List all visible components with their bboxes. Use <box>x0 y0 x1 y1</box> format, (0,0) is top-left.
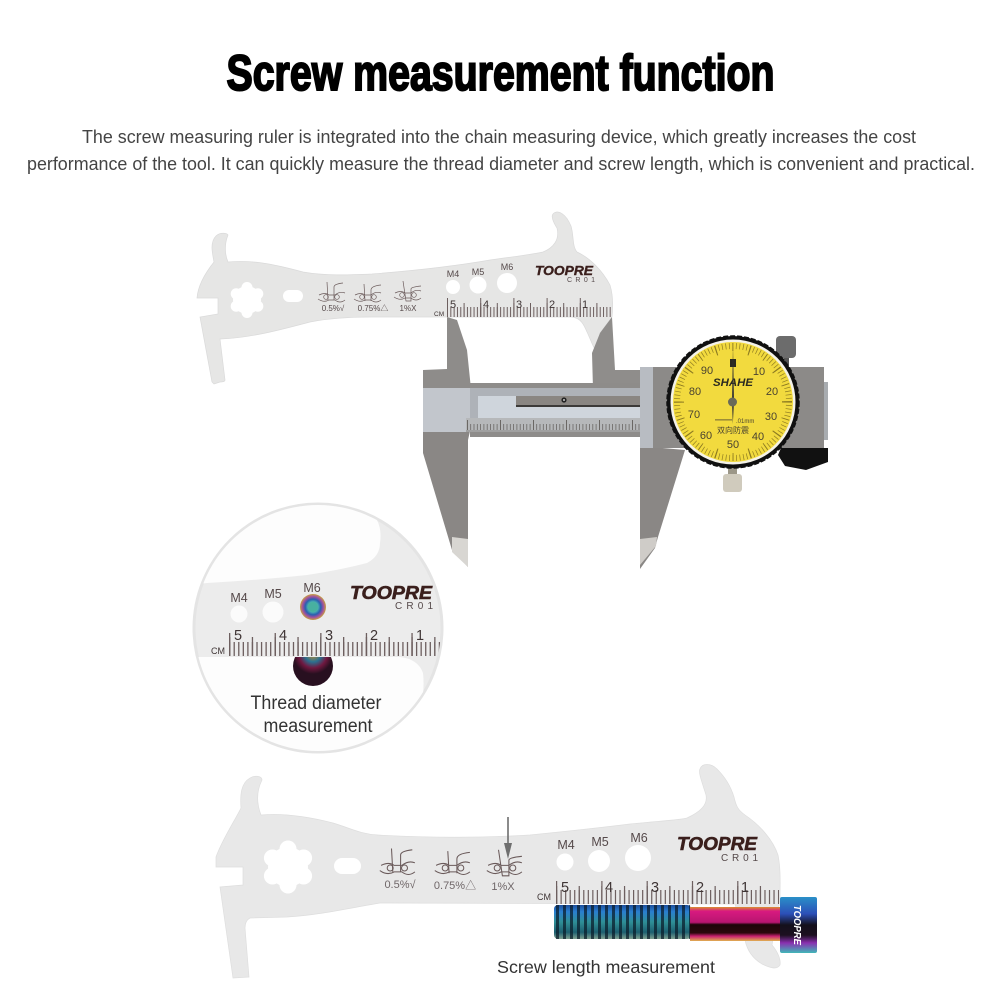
ruler numbers: CM <box>211 646 225 656</box>
thread <box>554 905 691 939</box>
ruler numbers: 5 <box>561 880 569 896</box>
dial numbers: 90 <box>701 365 713 377</box>
wear labels: 1%X <box>491 881 515 893</box>
intro text <box>27 127 975 174</box>
icon: chain wear 1% <box>394 281 421 301</box>
brand: TOOPRE <box>535 263 593 278</box>
intro text: performance of the tool. It can quickly measure the thread diameter and screw length, which is convenient and practical. <box>27 154 975 174</box>
dial numbers: 30 <box>765 411 777 423</box>
top chain measuring tool <box>197 212 613 384</box>
M labels: M4 <box>557 838 575 852</box>
dial numbers: 50 <box>727 439 739 451</box>
oval slot <box>334 858 361 874</box>
M labels: M5 <box>472 267 484 277</box>
M holes <box>446 273 517 294</box>
head: TOOPRE <box>791 905 803 946</box>
icon: six-lobe hole <box>231 282 263 318</box>
caption <box>250 693 382 737</box>
M labels <box>447 262 513 279</box>
model: CR01 <box>567 277 595 284</box>
ruler numbers: 1 <box>416 628 424 644</box>
ruler numbers: 4 <box>605 880 613 896</box>
screw tip below the ruler <box>293 657 333 686</box>
M labels: M6 <box>501 262 513 272</box>
hub <box>728 398 737 406</box>
ruler <box>229 644 441 649</box>
needle <box>732 346 734 424</box>
wear labels: 0.75%△ <box>358 304 388 313</box>
shank <box>690 907 780 941</box>
slider block <box>640 367 824 448</box>
caption: screw length: Screw length measurement <box>497 957 715 977</box>
lower right jaw <box>640 446 685 569</box>
dial numbers: 80 <box>689 386 701 398</box>
head <box>780 897 817 953</box>
ruler numbers <box>434 299 588 318</box>
ruler numbers <box>537 880 749 902</box>
M labels <box>557 831 648 852</box>
bottom chain measuring tool <box>216 764 817 978</box>
intro text: The screw measuring ruler is integrated into the chain measuring device, which greatly increases the cost <box>82 127 916 147</box>
wear labels: 0.75%△ <box>434 879 476 892</box>
dial scale note: .01mm <box>736 419 754 425</box>
icon: six-lobe hole <box>264 840 312 894</box>
oval slot <box>283 290 303 302</box>
arrow <box>504 817 512 859</box>
titanium screw <box>554 897 817 953</box>
ruler numbers: CM <box>537 892 551 902</box>
dial numbers: 40 <box>752 431 764 443</box>
ruler numbers: 4 <box>483 299 489 311</box>
main beam <box>423 383 645 437</box>
M labels: M4 <box>230 591 248 605</box>
thumb wheel <box>778 448 828 470</box>
ruler numbers: 2 <box>549 299 555 311</box>
icon: chain wear 0.5% <box>380 848 415 874</box>
model: CR01 <box>395 601 433 612</box>
ruler numbers: CM <box>434 311 444 318</box>
M labels <box>230 581 321 605</box>
dial gauge <box>667 336 799 468</box>
dial numbers <box>688 365 778 451</box>
ruler <box>556 892 779 897</box>
dial numbers: 10 <box>753 366 765 378</box>
top knob <box>776 336 796 370</box>
dial ticks <box>677 346 789 458</box>
ruler numbers: 3 <box>325 628 333 644</box>
ruler numbers: 2 <box>696 880 704 896</box>
icon: chain wear 0.75% <box>435 851 470 874</box>
upper right jaw <box>592 317 641 389</box>
white cutouts <box>190 500 424 760</box>
icon: chain wear 0.5% <box>318 282 345 302</box>
M holes <box>230 602 284 622</box>
screw seen through M6 <box>300 594 326 620</box>
magnifier circle: thread diameter <box>190 500 442 760</box>
M labels: M5 <box>591 835 609 849</box>
dial numbers: 60 <box>700 430 712 442</box>
upper left jaw <box>423 317 471 389</box>
ruler numbers: 2 <box>370 628 378 644</box>
icon: chain wear 0.75% <box>354 284 381 302</box>
dial zero mark <box>730 359 736 367</box>
M holes <box>556 845 651 872</box>
brand: TOOPRE <box>677 834 758 854</box>
title: Screw measurement function <box>226 45 774 101</box>
dial numbers: 70 <box>688 409 700 421</box>
ruler numbers: 5 <box>450 299 456 311</box>
dial scale note <box>715 419 754 435</box>
ruler <box>447 308 612 312</box>
wear labels: 0.5%√ <box>384 879 417 891</box>
caption: measurement <box>264 716 373 737</box>
wear labels <box>384 879 515 893</box>
model: CR01 <box>721 853 758 864</box>
ruler numbers: 3 <box>651 880 659 896</box>
ruler numbers: 5 <box>234 628 242 644</box>
bottom knob <box>723 465 742 492</box>
wear labels: 0.5%√ <box>322 304 345 313</box>
dial numbers: 20 <box>766 386 778 398</box>
M labels: M5 <box>264 587 282 601</box>
M labels: M6 <box>630 831 648 845</box>
ruler numbers: 4 <box>279 628 287 644</box>
icon: chain wear 1% <box>487 850 522 876</box>
caption: Thread diameter <box>250 693 382 714</box>
ruler numbers: 1 <box>582 299 588 311</box>
dial scale note: 双向防震 <box>717 425 749 435</box>
M labels: M6 <box>303 581 321 595</box>
ruler numbers: 1 <box>741 880 749 896</box>
wear labels: 1%X <box>400 304 417 313</box>
M labels: M4 <box>447 269 459 279</box>
wear labels <box>322 304 417 313</box>
ruler numbers <box>211 628 424 656</box>
brand: TOOPRE <box>350 583 433 603</box>
dial caliper <box>423 317 828 569</box>
lower left jaw <box>423 431 470 567</box>
dial brand: SHAHE <box>713 377 754 389</box>
ruler numbers: 3 <box>516 299 522 311</box>
